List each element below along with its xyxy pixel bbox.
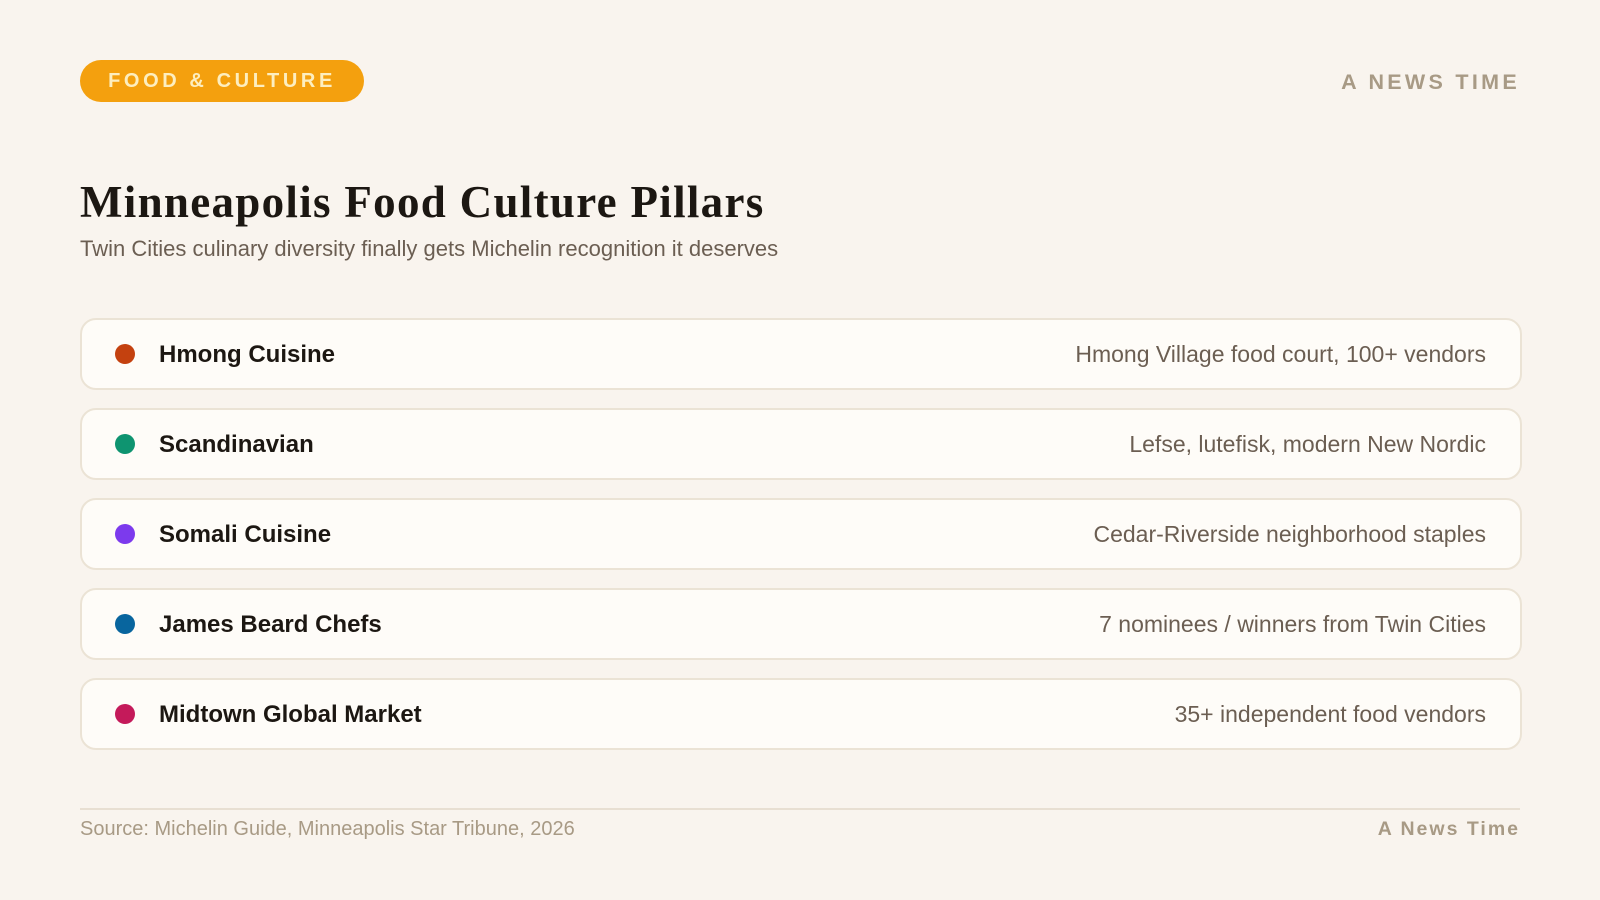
brand: A NEWS TIME: [1341, 70, 1520, 94]
row: Midtown Global Market: 35+ independent food vendors: [1175, 701, 1486, 727]
tag pill: [80, 60, 364, 102]
row: Somali Cuisine: Cedar-Riverside neighborhood staples: [1093, 521, 1486, 547]
row: Scandinavian: [80, 408, 1522, 480]
row: Midtown Global Market: Midtown Global Market: [159, 701, 422, 728]
source: Source: Michelin Guide, Minneapolis Star Tribune, 2026: [80, 818, 575, 840]
tag pill: FOOD & CULTURE: [108, 70, 336, 92]
footer brand: A News Time: [1378, 818, 1520, 840]
row: Hmong Cuisine: Hmong Cuisine: [159, 341, 335, 368]
row: Midtown Global Market: [80, 678, 1522, 750]
row: Hmong Cuisine: Hmong Village food court, 100+ vendors: [1075, 341, 1486, 367]
row: James Beard Chefs: [80, 588, 1522, 660]
row: Scandinavian: Scandinavian: [159, 431, 314, 458]
subtitle: Twin Cities culinary diversity finally gets Michelin recognition it deserves: [80, 236, 778, 261]
row: Somali Cuisine: [80, 498, 1522, 570]
row: James Beard Chefs: 7 nominees / winners from Twin Cities: [1099, 611, 1486, 637]
row: Scandinavian: Lefse, lutefisk, modern New Nordic: [1129, 431, 1486, 457]
row: Somali Cuisine: Somali Cuisine: [159, 521, 331, 548]
row: Hmong Cuisine: [80, 318, 1522, 390]
title: Minneapolis Food Culture Pillars: [80, 177, 765, 227]
row: James Beard Chefs: James Beard Chefs: [159, 611, 382, 638]
